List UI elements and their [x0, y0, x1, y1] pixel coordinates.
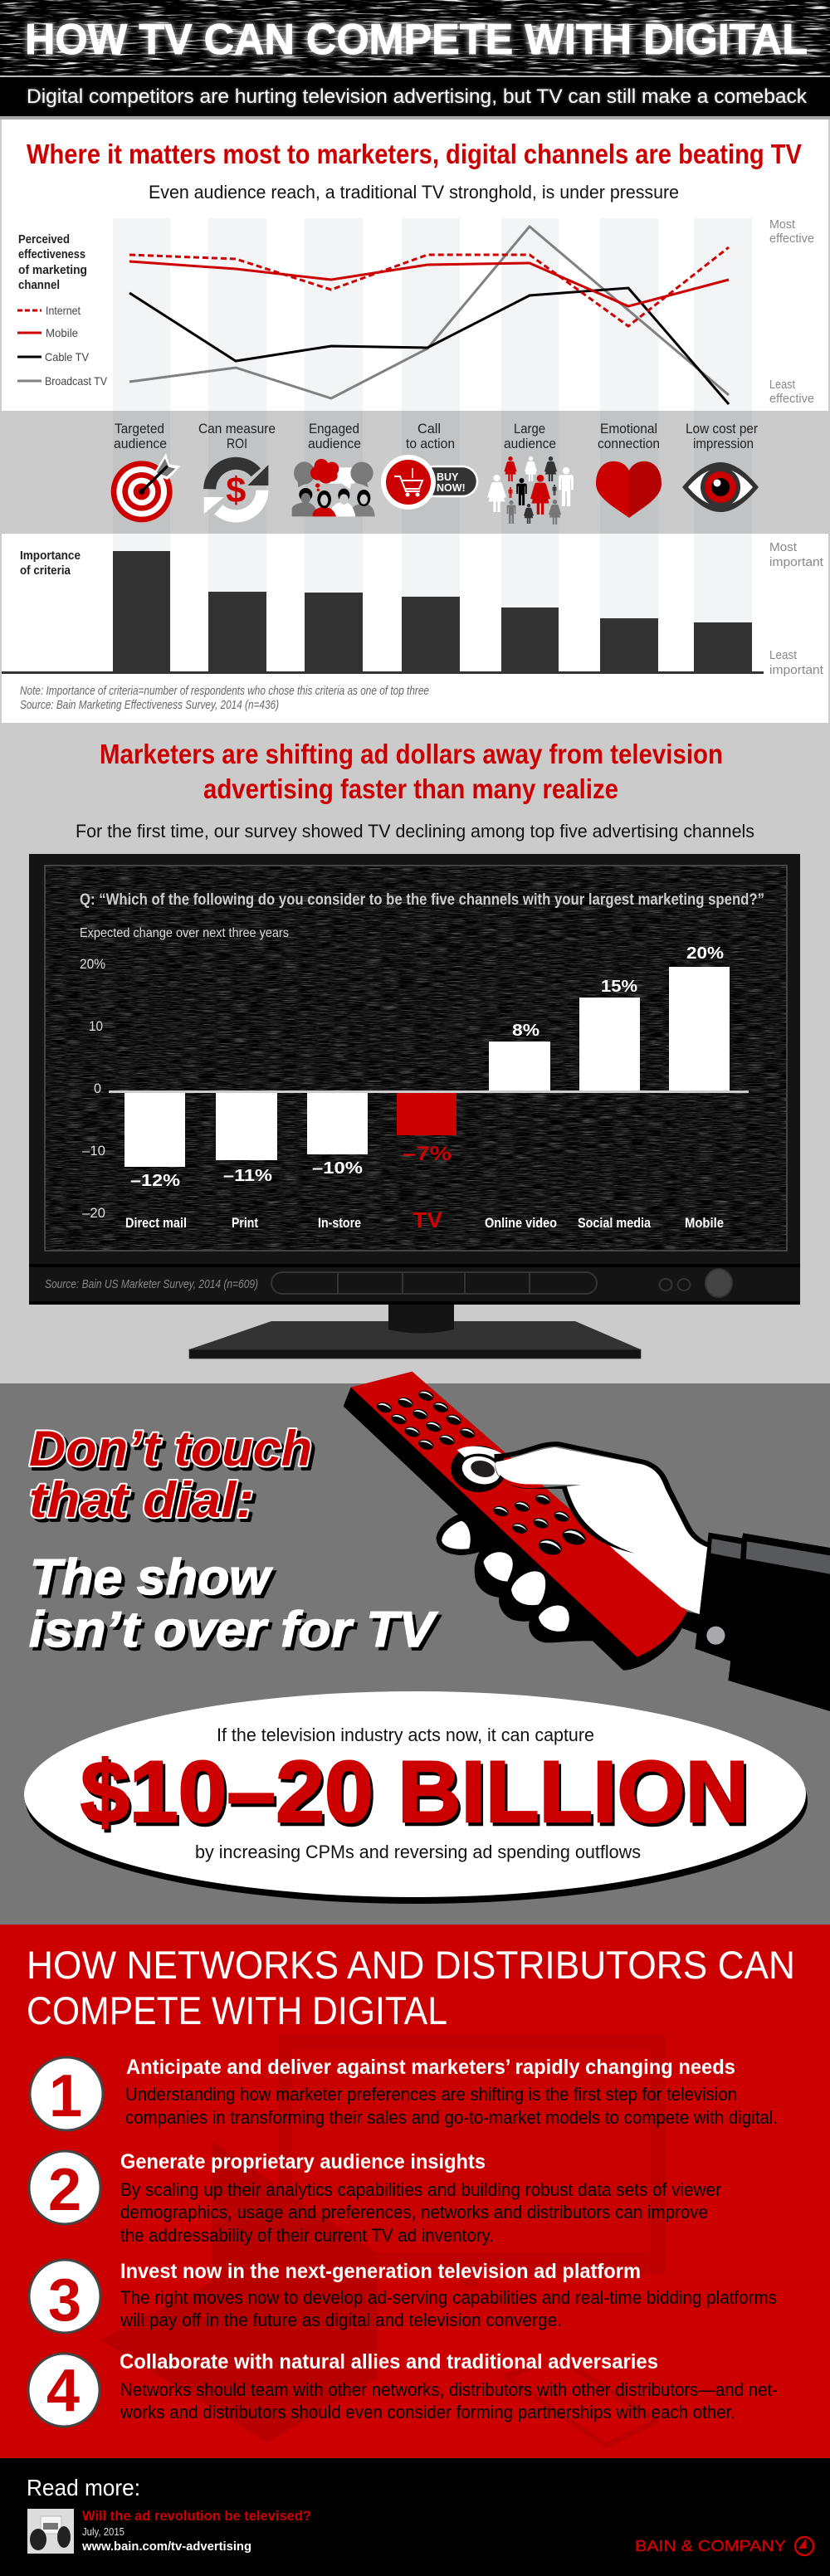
value labels: –11%	[223, 1167, 272, 1185]
criteria labels: to action	[406, 436, 455, 451]
criteria labels: connection	[598, 436, 660, 451]
value labels: –12%	[130, 1172, 180, 1190]
item 4: 4	[46, 2358, 80, 2424]
legend: Cable TV	[45, 350, 90, 363]
item 4: Collaborate with natural allies and traditional adversaries	[120, 2350, 658, 2374]
item 3: The right moves now to develop ad-serving capabilities and real-time bidding platforms	[120, 2287, 777, 2308]
category labels: TV	[413, 1208, 443, 1232]
source note	[20, 684, 429, 712]
line: cable TV	[129, 288, 729, 404]
watermark devices	[100, 2035, 666, 2446]
item 1: companies in transforming their sales and go-to-market models to compete with digital.	[125, 2107, 778, 2128]
criteria labels	[114, 421, 758, 451]
axis title: of marketing	[18, 263, 87, 277]
axis title: of criteria	[20, 564, 71, 578]
icon: ROI arrows: $	[226, 471, 246, 510]
legend	[17, 304, 108, 388]
column bands	[113, 218, 752, 411]
line: mobile	[129, 261, 729, 306]
thumbnail	[27, 2509, 74, 2554]
y axis labels: 10	[89, 1018, 103, 1034]
icon: buy now	[381, 455, 477, 510]
criteria labels: audience	[114, 436, 167, 451]
scale labels: Most	[769, 217, 796, 232]
value labels	[130, 944, 724, 1190]
y axis labels: 20%	[80, 956, 105, 972]
criteria labels: Low cost per	[686, 421, 758, 437]
heading: shifting ad dollars: advertising faster than many realize	[203, 773, 618, 804]
heading: HOW NETWORKS AND DISTRIBUTORS CAN	[27, 1943, 795, 1987]
headline: the show isn't over	[29, 1549, 438, 1657]
item 2: demographics, usage and preferences, networks and distributors can improve	[120, 2202, 708, 2222]
report date: July, 2015	[82, 2525, 124, 2538]
callout text bottom: by increasing CPMs and reversing ad spending outflows	[195, 1842, 641, 1862]
subtitle bar	[0, 77, 830, 116]
icon: ROI arrows	[204, 463, 268, 516]
remote keys	[375, 1388, 588, 1558]
criteria labels: ROI	[227, 436, 247, 451]
y axis labels: –10	[82, 1143, 105, 1159]
y axis labels: 0	[94, 1081, 101, 1096]
item 3	[29, 2260, 777, 2334]
icon: buy now: BUY	[437, 471, 459, 483]
logo: Bain & Company	[635, 2537, 813, 2555]
axis title	[20, 549, 81, 578]
title: HOW TV CAN COMPETE WITH DIGITAL	[25, 16, 808, 64]
item 2: Generate proprietary audience insights	[120, 2150, 486, 2174]
scale labels: Least	[769, 378, 796, 392]
criteria labels: Emotional	[600, 421, 657, 437]
TV body	[29, 854, 800, 1305]
legend: Internet	[46, 304, 81, 317]
heading: COMPETE WITH DIGITAL	[27, 1988, 447, 2032]
callout text top: If the television industry acts now, it can capture	[217, 1725, 594, 1745]
item 2: 2	[48, 2157, 81, 2223]
scale labels: important	[769, 663, 824, 677]
TV stand	[189, 1303, 641, 1359]
item 1: 1	[49, 2063, 82, 2130]
value labels: –7%	[403, 1143, 452, 1165]
panel: don't touch that dial	[0, 1372, 830, 1925]
axis title: effectiveness	[18, 247, 85, 261]
scale labels: effective	[769, 232, 814, 246]
headline: the show isn't over: The show	[30, 1549, 272, 1605]
criteria labels: Large	[514, 421, 545, 437]
item 3: Invest now in the next-generation television ad platform	[120, 2260, 641, 2283]
icon: large audience	[487, 456, 574, 524]
source note: Note: Importance of criteria=number of respondents who chose this criteria as one of top three	[20, 684, 429, 698]
heading: shifting ad dollars: Marketers are shifting ad dollars away from television	[100, 739, 723, 769]
value labels: 20%	[686, 944, 724, 963]
legend: Broadcast TV	[45, 374, 108, 388]
axis title: Importance	[20, 549, 81, 563]
axis title	[18, 232, 87, 292]
scale labels	[769, 540, 824, 677]
remote side and fingers	[344, 1388, 686, 1671]
screen	[45, 866, 787, 1251]
headline: don't touch that dial	[29, 1421, 312, 1528]
category labels: Social media	[578, 1215, 651, 1231]
report url: www.bain.com/tv-advertising	[81, 2539, 251, 2554]
bar chart	[124, 967, 730, 1167]
headline: don't touch that dial: that dial:	[29, 1472, 254, 1528]
icon: engaged audience	[292, 459, 375, 516]
category labels	[125, 1208, 724, 1232]
axis caption: Expected change over next three years	[80, 926, 289, 940]
remote dial	[451, 1446, 506, 1492]
value labels: 15%	[601, 978, 637, 996]
icon: eye	[682, 462, 759, 512]
subtitle: Digital competitors are hurting television advertising, but TV can still make a comeback	[27, 85, 808, 108]
scale labels: Least	[769, 648, 798, 662]
icon: heart	[596, 461, 662, 518]
item 3: 3	[48, 2267, 81, 2334]
panel: importance bars	[2, 534, 828, 723]
header banner	[0, 0, 830, 120]
hand	[496, 1447, 708, 1614]
static noise band	[0, 0, 830, 76]
panel: footer	[0, 2458, 830, 2576]
report title: Will the ad revolution be televised?	[82, 2508, 311, 2524]
headline: the show isn't over: isn’t over for TV	[29, 1602, 438, 1657]
item 4: Networks should team with other networks, distributors with other distributors—and net-	[120, 2379, 778, 2400]
callout figure: $10–20 BILLION	[81, 1744, 749, 1841]
icon: target	[111, 453, 180, 522]
y axis labels: –20	[82, 1205, 105, 1221]
subheading: Even audience reach, a traditional TV stronghold, is under pressure	[149, 182, 679, 202]
item 4: works and distributors should even consider forming partnerships with each other.	[120, 2402, 735, 2422]
item 1: Understanding how marketer preferences are shifting is the first step for television	[125, 2084, 737, 2105]
TV buttons	[271, 1269, 732, 1297]
criteria labels: impression	[693, 436, 754, 451]
illustration: hand holding remote	[344, 1372, 830, 1711]
axis title: channel	[18, 278, 60, 292]
panel: effectiveness chart	[2, 120, 828, 411]
value labels: 8%	[512, 1022, 540, 1040]
category labels: Print	[232, 1215, 258, 1231]
remote face	[351, 1372, 687, 1657]
read more: Read more:	[27, 2475, 140, 2500]
item 1: Anticipate and deliver against marketers’ rapidly changing needs	[126, 2056, 735, 2079]
fingernails	[442, 1521, 569, 1632]
icon: buy now: NOW!	[437, 482, 466, 494]
legend: Mobile	[46, 326, 78, 339]
panel: television with chart	[29, 854, 800, 1359]
scale labels	[769, 217, 814, 406]
item 4	[28, 2350, 778, 2427]
item 2	[29, 2150, 721, 2246]
panel: criteria strip	[0, 411, 830, 534]
item 2: the addressability of their current TV ad inventory.	[120, 2225, 494, 2246]
item 3: will pay off in the future as digital and television converge.	[120, 2310, 562, 2330]
bar chart	[2, 551, 764, 674]
criteria labels: Can measure	[198, 421, 276, 437]
heading	[27, 1943, 795, 2032]
criteria labels: audience	[504, 436, 556, 451]
callout: billion ellipse	[24, 1691, 808, 1904]
y axis labels	[80, 956, 105, 1221]
criteria labels: Call	[417, 421, 441, 437]
headline: don't touch that dial: Don’t touch	[29, 1421, 312, 1476]
item 1	[30, 2056, 778, 2130]
scale labels: important	[769, 555, 824, 569]
value labels: –10%	[312, 1159, 363, 1178]
source note: Source: Bain Marketing Effectiveness Survey, 2014 (n=436)	[20, 698, 279, 712]
criteria labels: Targeted	[115, 421, 164, 437]
scale labels: effective	[769, 392, 814, 406]
line: broadcast TV	[129, 227, 729, 398]
category labels: In-store	[318, 1215, 361, 1231]
line chart	[129, 227, 729, 404]
criteria labels: audience	[308, 436, 361, 451]
category labels: Mobile	[685, 1215, 724, 1231]
category labels: Online video	[485, 1215, 557, 1231]
subheading: For the first time, our survey showed TV declining among top five advertising channels	[76, 821, 754, 842]
category labels: Direct mail	[125, 1215, 187, 1231]
logo: Bain & Company: BAIN & COMPANY	[635, 2538, 786, 2554]
source note: Source: Bain US Marketer Survey, 2014 (n=609)	[45, 1277, 258, 1291]
panel: how networks and distributors can compete	[0, 1925, 830, 2458]
axis title: Perceived	[18, 232, 70, 246]
heading: shifting ad dollars	[100, 739, 723, 804]
sleeve	[681, 1533, 830, 1711]
line: internet	[129, 247, 729, 326]
scale labels: Most	[769, 540, 798, 554]
criteria labels: Engaged	[309, 421, 359, 437]
item 2: By scaling up their analytics capabilities and building robust data sets of viewer	[120, 2179, 721, 2200]
